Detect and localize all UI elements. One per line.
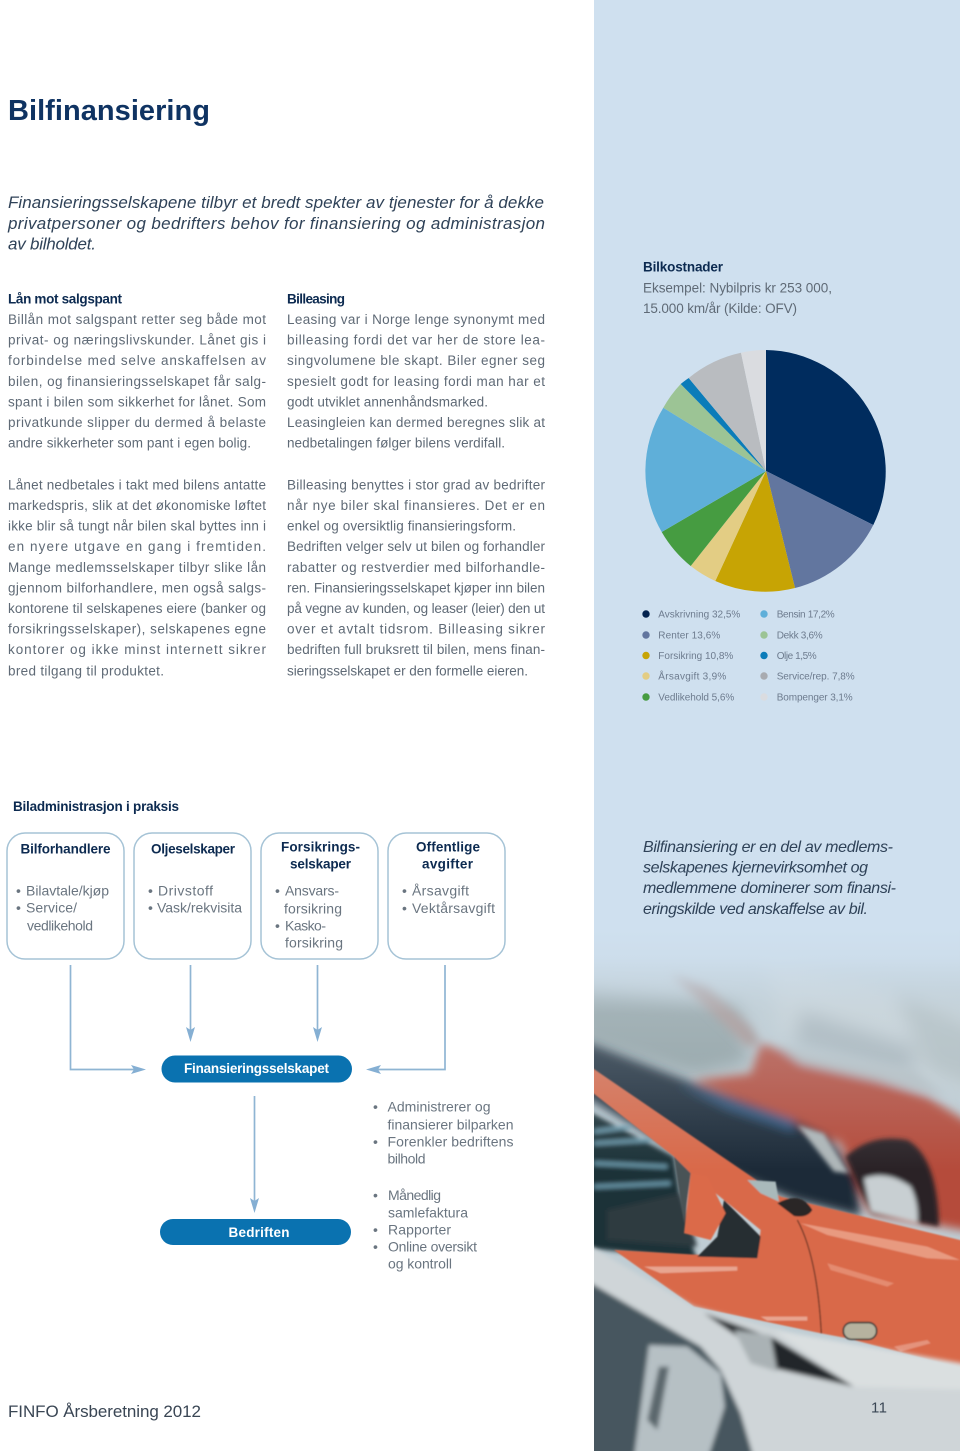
text column: Billeasing: billeasing fordi det var her de store lea- xyxy=(287,333,545,348)
list: financing company services: • xyxy=(373,1134,378,1150)
callout text: Bilfinansiering er en del av medlems- xyxy=(643,839,893,856)
intro text: av bilholdet. xyxy=(8,234,96,254)
text column: Lån mot salgspant: privatkunde slipper du dermed å belaste xyxy=(8,415,266,430)
text column: Billeasing: nedbetalingen følger bilens verdifall. xyxy=(287,436,505,451)
list: company benefits: • xyxy=(373,1222,378,1238)
box: Forsikringsselskaper: Forsikrings- xyxy=(281,840,360,854)
pie chart xyxy=(645,350,886,592)
chart legend: Forsikring 10,8% xyxy=(658,651,733,662)
text column: Billeasing: Billeasing benyttes i stor grad av bedrifter xyxy=(287,478,546,492)
text column: Billeasing: spesielt godt for leasing fordi man har et xyxy=(287,374,545,389)
text column: Lån mot salgspant: ikke blir så tungt når bilen skal byttes inn i xyxy=(8,519,266,534)
box: Offentlige avgifter: Årsavgift xyxy=(412,882,469,898)
box: Forsikringsselskaper: Ansvars- xyxy=(285,882,339,898)
chart legend: Årsavgift 3,9% xyxy=(658,670,726,682)
text column: Lån mot salgspant: kontorene til selskapenes eiere (banker og xyxy=(8,601,266,616)
text column: Lån mot salgspant xyxy=(8,292,266,678)
pill: Bedriften xyxy=(160,1219,351,1245)
text column: Lån mot salgspant: bred tilgang til produktet. xyxy=(8,664,164,678)
box: Forsikringsselskaper: Kasko- xyxy=(285,918,326,934)
list: company benefits: og kontroll xyxy=(388,1256,452,1272)
chart legend xyxy=(642,610,855,704)
text column: Billeasing: sieringsselskapet er den formelle eieren. xyxy=(287,664,528,678)
arrow: Forsikringsselskaper to Finansieringsselskapet xyxy=(313,965,322,1042)
text column: Billeasing: ren. Finansieringsselskapet kjøper inn bilen xyxy=(287,580,545,595)
callout text: selskapenes kjernevirksomhet og xyxy=(643,860,868,876)
box: Bilforhandlere: • xyxy=(16,882,21,898)
box: Bilforhandlere: • xyxy=(16,900,21,916)
list: company benefits: Rapporter xyxy=(388,1222,451,1238)
photo: parked cars xyxy=(594,966,960,1451)
list: company benefits: • xyxy=(373,1187,378,1203)
chart legend: Renter 13,6% xyxy=(658,630,720,642)
text column: Billeasing: godt utviklet annenhåndsmarked. xyxy=(287,394,488,409)
box: Forsikringsselskaper: • xyxy=(275,918,280,934)
list: financing company services: finansierer bilparken xyxy=(388,1116,514,1132)
arrow: Bilforhandlere to Finansieringsselskapet xyxy=(70,965,146,1074)
box: Oljeselskaper: Drivstoff xyxy=(158,882,213,898)
callout text: medlemmene dominerer som finansi- xyxy=(643,880,896,897)
chart legend: Avskrivning 32,5% xyxy=(658,610,740,620)
list: company benefits: samlefaktura xyxy=(388,1204,468,1220)
chart heading: Bilkostnader: 15.000 km/år (Kilde: OFV) xyxy=(643,301,797,316)
text column: Billeasing: Leasingleien kan dermed beregnes slik at xyxy=(287,415,545,430)
arrow: Oljeselskaper to Finansieringsselskapet xyxy=(186,965,195,1042)
box: Offentlige avgifter xyxy=(388,833,505,959)
sidebar panel xyxy=(594,0,960,1451)
box: Forsikringsselskaper: forsikring xyxy=(284,900,342,916)
pill: Bedriften: Bedriften xyxy=(228,1225,290,1240)
box: Bilforhandlere: Service/ xyxy=(26,900,77,916)
intro text: Finansieringsselskapene tilbyr et bredt spekter av tjenester for å dekke xyxy=(8,193,544,212)
box: Bilforhandlere: Bilavtale/kjøp xyxy=(26,882,109,898)
text column: Lån mot salgspant: Lån mot salgspant xyxy=(8,292,122,306)
list: financing company services xyxy=(373,1098,514,1166)
text column: Billeasing xyxy=(287,292,546,678)
list: company benefits: Månedlig xyxy=(388,1187,441,1203)
text column: Lån mot salgspant: en nyere utgave en gang i fremtiden. xyxy=(8,539,266,554)
box: Bilforhandlere: vedlikehold xyxy=(27,918,93,934)
section heading: Biladministrasjon i praksis: Biladministrasjon i praksis xyxy=(13,799,179,814)
chart heading: Bilkostnader: Bilkostnader xyxy=(643,260,724,274)
pill: Finansieringsselskapet: Finansieringsselskapet xyxy=(184,1061,330,1076)
box: Forsikringsselskaper: • xyxy=(275,882,280,898)
chart legend: Olje 1,5% xyxy=(777,651,817,662)
box: Oljeselskaper: Vask/rekvisita xyxy=(157,900,242,916)
list: financing company services: Forenkler bedriftens xyxy=(388,1134,514,1150)
box: Offentlige avgifter: • xyxy=(402,882,407,898)
text column: Lån mot salgspant: andre sikkerheter som pant i egen bolig. xyxy=(8,436,251,451)
box: Oljeselskaper: Oljeselskaper xyxy=(151,842,236,856)
chart heading: Bilkostnader: Eksempel: Nybilpris kr 253 000, xyxy=(643,280,832,296)
list: company benefits xyxy=(373,1187,477,1272)
text column: Billeasing: på vegne av kunden, og leaser (leier) den ut xyxy=(287,601,545,616)
text column: Lån mot salgspant: spant i bilen som sikkerhet for lånet. Som xyxy=(8,394,266,409)
pill: Finansieringsselskapet xyxy=(162,1056,352,1082)
chart legend: Vedlikehold 5,6% xyxy=(658,692,734,704)
list: company benefits: Online oversikt xyxy=(388,1238,477,1254)
arrow: Offentlige avgifter to Finansieringsselskapet xyxy=(366,965,445,1074)
text column: Billeasing: Bedriften velger selv ut bilen og forhandler xyxy=(287,539,546,554)
text column: Billeasing: singvolumene ble skapt. Biler egner seg xyxy=(287,353,545,368)
box: Oljeselskaper: • xyxy=(148,882,153,898)
box: Offentlige avgifter: Vektårsavgift xyxy=(412,900,495,916)
text column: Lån mot salgspant: forbindelse med selve anskaffelsen av xyxy=(8,353,266,368)
box: Offentlige avgifter: avgifter xyxy=(422,856,474,872)
chart legend: Bensin 17,2% xyxy=(777,610,835,620)
list: company benefits: • xyxy=(373,1238,378,1254)
box: Forsikringsselskaper: selskaper xyxy=(290,856,352,872)
text column: Lån mot salgspant: kontorer og ikke minst internett sikrer xyxy=(8,642,266,657)
intro text xyxy=(7,193,545,254)
text column: Lån mot salgspant: bilen, og finansieringsselskapet får salg- xyxy=(8,374,266,389)
box: Offentlige avgifter: Offentlige xyxy=(416,840,480,854)
text column: Billeasing: bedriften full bruksrett til bilen, mens finan- xyxy=(287,642,545,657)
text column: Lån mot salgspant: forsikringsselskaper), selskapenes egne xyxy=(8,622,266,637)
box: Bilforhandlere: Bilforhandlere xyxy=(20,842,111,856)
intro text: privatpersoner og bedrifters behov for finansiering og administrasjon xyxy=(7,214,545,233)
chart legend: Service/rep. 7,8% xyxy=(777,672,855,682)
text column: Billeasing: Leasing var i Norge lenge synonymt med xyxy=(287,312,545,327)
box: Oljeselskaper: • xyxy=(148,900,153,916)
text column: Lån mot salgspant: gjennom bilforhandlere, men også salgs- xyxy=(8,580,266,595)
chart legend: Bompenger 3,1% xyxy=(777,692,853,704)
callout text: eringskilde ved anskaffelse av bil. xyxy=(643,901,868,918)
list: financing company services: • xyxy=(373,1098,378,1114)
text column: Billeasing: enkel og oversiktlig finansieringsform. xyxy=(287,519,516,534)
box: Offentlige avgifter: • xyxy=(402,900,407,916)
chart heading: Bilkostnader xyxy=(643,260,832,316)
list: financing company services: Administrerer og xyxy=(388,1098,490,1114)
chart legend: Dekk 3,6% xyxy=(777,630,823,642)
text column: Billeasing: Billeasing xyxy=(287,292,345,306)
text column: Lån mot salgspant: Billån mot salgspant retter seg både mot xyxy=(8,312,266,327)
text column: Lån mot salgspant: markedspris, slik at det økonomiske løftet xyxy=(8,498,266,513)
text column: Billeasing: når nye biler skal finansieres. Det er en xyxy=(287,498,545,513)
arrow: Finansieringsselskapet to Bedriften xyxy=(250,1096,259,1213)
text column: Billeasing: rabatter og restverdier med bilforhandle- xyxy=(287,560,545,575)
text column: Lån mot salgspant: Mange medlemsselskaper tilbyr slike lån xyxy=(8,560,266,575)
list: financing company services: bilhold xyxy=(388,1150,426,1166)
box: Oljeselskaper xyxy=(134,833,251,959)
box: Forsikringsselskaper xyxy=(261,833,378,959)
text column: Lån mot salgspant: privat- og næringslivskunder. Lånet gis i xyxy=(8,333,266,348)
box: Bilforhandlere xyxy=(7,833,124,959)
footer: FINFO Årsberetning 2012 xyxy=(8,1402,201,1421)
text column: Lån mot salgspant: Lånet nedbetales i takt med bilens antatte xyxy=(8,478,266,492)
callout text xyxy=(643,839,896,918)
text column: Billeasing: over et avtalt tidsrom. Billeasing sikrer xyxy=(287,622,546,637)
page number: 11 xyxy=(871,1400,887,1416)
title: Bilfinansiering xyxy=(8,95,210,127)
box: Forsikringsselskaper: forsikring xyxy=(285,934,343,950)
